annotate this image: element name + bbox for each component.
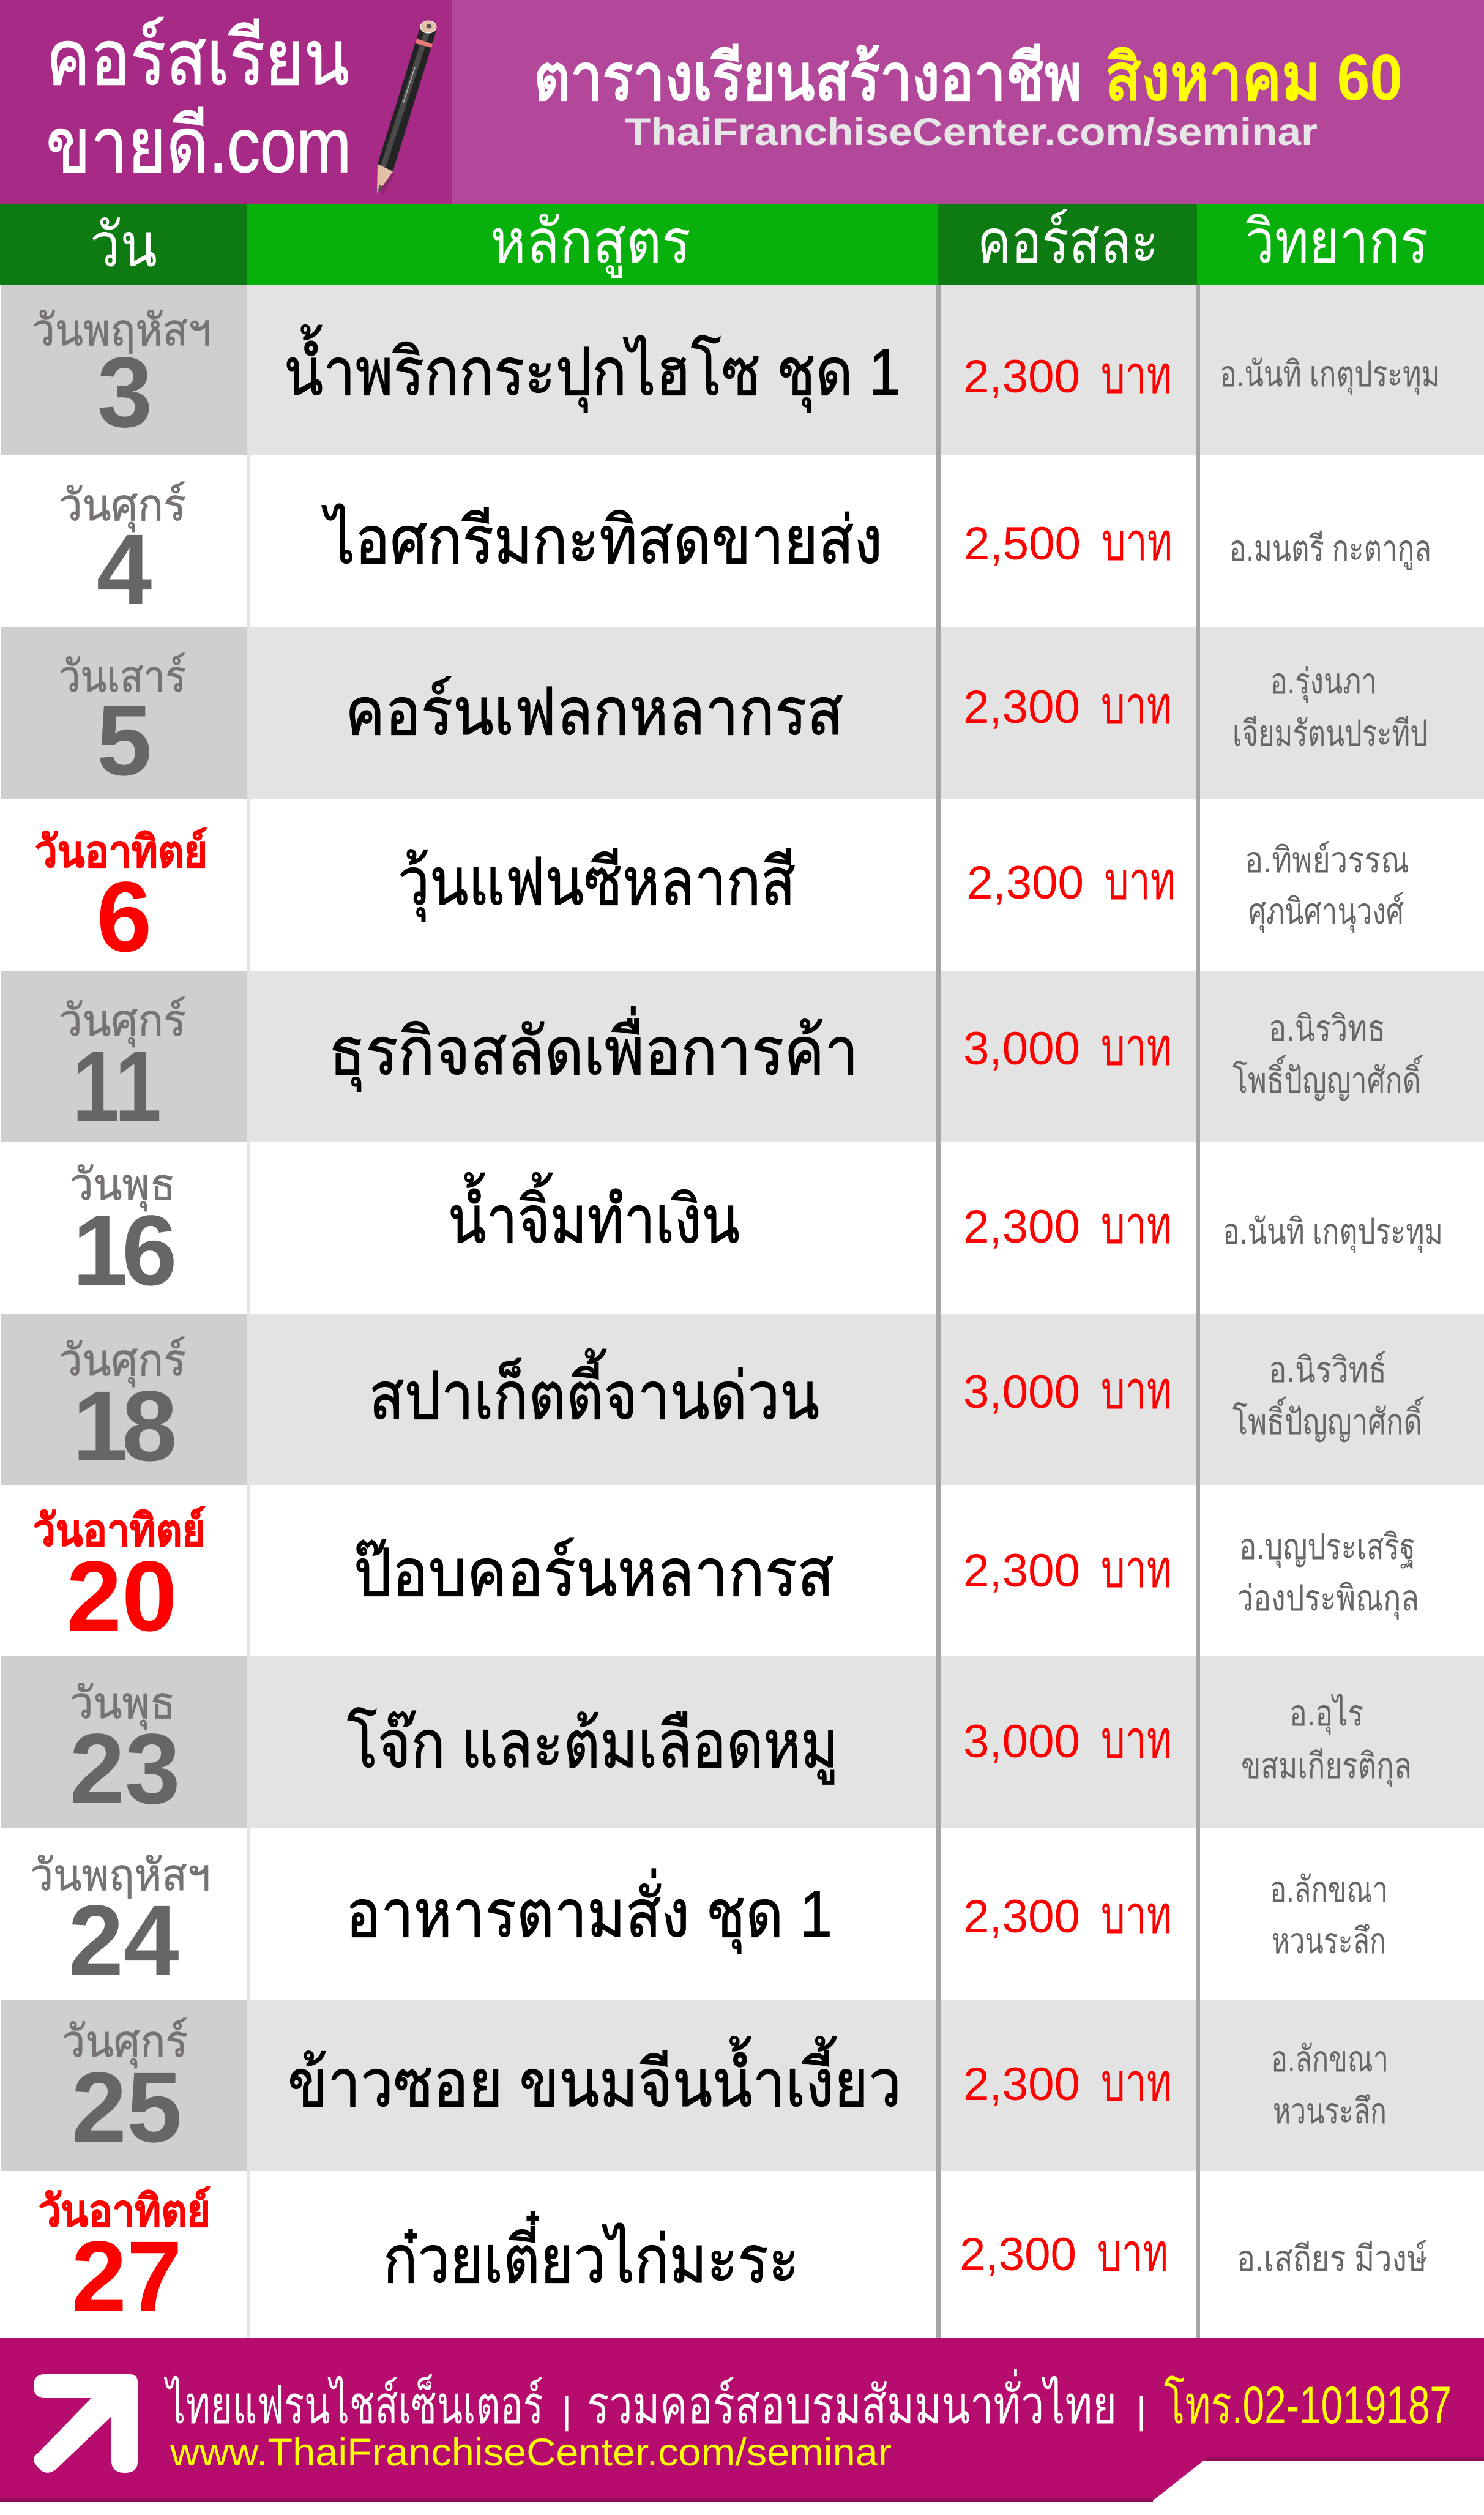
footer text: separator: | bbox=[562, 2390, 572, 2432]
date number: 27 bbox=[71, 2220, 182, 2332]
price: บาท bbox=[1101, 346, 1172, 405]
icon: arrow bbox=[34, 2374, 138, 2473]
price bbox=[963, 1711, 1172, 1769]
footer banner bbox=[0, 2338, 1484, 2502]
price: บาท bbox=[1101, 1711, 1172, 1769]
day label: วันศุกร์ bbox=[59, 1336, 186, 1387]
instructor bbox=[1270, 1870, 1388, 1961]
day label: วันอาทิตย์ bbox=[35, 827, 207, 876]
date number: 20 bbox=[66, 1540, 177, 1652]
instructor: ศุภนิศานุวงศ์ bbox=[1248, 892, 1404, 933]
price: บาท bbox=[1101, 2053, 1172, 2112]
price bbox=[963, 1361, 1172, 1420]
day label: วันอาทิตย์ bbox=[33, 1506, 206, 1555]
instructor: ขสมเกียรติกุล bbox=[1241, 1746, 1412, 1788]
instructor bbox=[1241, 1693, 1412, 1788]
row 11 bbox=[62, 2017, 1389, 2163]
price: 2,300 bbox=[960, 2229, 1076, 2281]
footer text: company: ไทยแฟรนไชส์เซ็นเตอร์ bbox=[164, 2374, 543, 2435]
instructor: เจียมรัตนประทีป bbox=[1232, 714, 1428, 753]
row 12 bbox=[39, 2186, 1427, 2332]
date number: 18 bbox=[72, 1370, 174, 1482]
day label: วันพุธ bbox=[70, 1160, 176, 1211]
icon: pencil bbox=[377, 21, 436, 197]
price: 2,300 bbox=[963, 1891, 1080, 1943]
row 9 bbox=[69, 1679, 1412, 1825]
logo text: course site name line 2: ขายดี.com bbox=[46, 102, 351, 189]
price: บาท bbox=[1101, 1361, 1172, 1420]
price bbox=[963, 2053, 1172, 2112]
course name: น้ำจิ้มทำเงิน bbox=[448, 1172, 740, 1257]
price: 3,000 bbox=[963, 1023, 1080, 1075]
price bbox=[963, 346, 1172, 405]
instructor bbox=[1237, 1527, 1419, 1620]
course name: ธุรกิจสลัดเพื่อการค้า bbox=[329, 1006, 859, 1092]
price: บาท bbox=[1102, 513, 1173, 572]
price: 3,000 bbox=[963, 1366, 1080, 1418]
footer text: tagline: รวมคอร์สอบรมสัมมนาทั่วไทย bbox=[587, 2369, 1117, 2435]
table header bbox=[0, 204, 1484, 285]
instructor: อ.ลักขณา bbox=[1271, 2039, 1389, 2079]
instructor: อ.นิรวิทธ์ bbox=[1269, 1350, 1387, 1390]
instructor: หวนระลึก bbox=[1272, 1921, 1386, 1961]
day label: วันพฤหัสฯ bbox=[32, 306, 211, 355]
panel: title banner bbox=[452, 0, 1484, 204]
row 2 bbox=[59, 481, 1431, 625]
date number: 5 bbox=[97, 684, 152, 796]
header: course: หลักสูตร bbox=[490, 207, 691, 278]
row 3 bbox=[59, 652, 1428, 796]
header: instructor: วิทยากร bbox=[1245, 207, 1428, 276]
instructor bbox=[1232, 1350, 1424, 1442]
instructor: โพธิ์ปัญญาศักดิ์ bbox=[1232, 1055, 1423, 1101]
price: บาท bbox=[1101, 1018, 1172, 1077]
course name: น้ำพริกกระปุกไฮโซ ชุด 1 bbox=[284, 324, 901, 413]
instructor: อ.รุ่งนภา bbox=[1270, 662, 1377, 703]
day label: วันพฤหัสฯ bbox=[30, 1851, 211, 1900]
price: บาท bbox=[1101, 1540, 1172, 1599]
course name: ป๊อบคอร์นหลากรส bbox=[354, 1536, 834, 1610]
date number: 24 bbox=[68, 1884, 179, 1996]
subtitle url: ThaiFranchiseCenter.com/seminar bbox=[625, 111, 1318, 154]
instructor: ว่องประพิณกุล bbox=[1237, 1579, 1419, 1620]
price: บาท bbox=[1105, 852, 1176, 911]
date number: 16 bbox=[72, 1194, 174, 1306]
price bbox=[963, 676, 1172, 735]
course name: ข้าวซอย ขนมจีนน้ำเงี้ยว bbox=[288, 2036, 901, 2120]
price bbox=[963, 1196, 1172, 1255]
row 1 bbox=[32, 306, 1440, 448]
day label: วันศุกร์ bbox=[62, 2017, 188, 2068]
instructor bbox=[1232, 1009, 1423, 1101]
instructor bbox=[1232, 662, 1428, 753]
logo text: course site name line 1: คอร์สเรียน bbox=[46, 15, 349, 101]
instructor: อ.ทิพย์วรรณ bbox=[1245, 840, 1409, 880]
row 10 bbox=[30, 1851, 1388, 1996]
price bbox=[960, 2224, 1168, 2282]
price: 3,000 bbox=[963, 1716, 1080, 1768]
course name: ไอศกรีมกะทิสดขายส่ง bbox=[321, 503, 882, 577]
price bbox=[967, 852, 1176, 911]
header: price per course: คอร์สละ bbox=[977, 207, 1158, 276]
day label: วันเสาร์ bbox=[59, 652, 186, 701]
course name: วุ้นแฟนซีหลากสี bbox=[398, 845, 796, 922]
date number: 11 bbox=[72, 1030, 162, 1142]
title month: สิงหาคม 60 bbox=[1105, 42, 1403, 114]
instructor: หวนระลึก bbox=[1273, 2091, 1387, 2131]
price: 2,300 bbox=[963, 351, 1080, 403]
footer text: separator: | bbox=[1136, 2390, 1146, 2432]
date number: 4 bbox=[97, 513, 152, 625]
price bbox=[963, 1018, 1172, 1077]
footer text: website: www.ThaiFranchiseCenter.com/seminar bbox=[170, 2431, 892, 2474]
price bbox=[963, 1540, 1172, 1599]
header: day: วัน bbox=[90, 211, 157, 280]
price: บาท bbox=[1101, 1196, 1172, 1255]
course name: โจ๊ก และต้มเลือดหมู bbox=[347, 1707, 838, 1785]
price bbox=[963, 1886, 1172, 1945]
title: ตารางเรียนสร้างอาชีพ bbox=[534, 42, 1082, 114]
price: 2,300 bbox=[963, 2058, 1080, 2110]
day label: วันศุกร์ bbox=[59, 996, 186, 1047]
instructor: อ.บุญประเสริฐ bbox=[1239, 1527, 1415, 1569]
price: 2,300 bbox=[967, 857, 1084, 909]
row 6 bbox=[70, 1160, 1443, 1306]
price bbox=[964, 513, 1173, 572]
date number: 3 bbox=[97, 336, 152, 448]
date number: 23 bbox=[69, 1713, 181, 1825]
price: บาท bbox=[1101, 676, 1172, 735]
row 4 bbox=[35, 827, 1409, 973]
day label: วันพุธ bbox=[70, 1679, 176, 1730]
course name: คอร์นเฟลกหลากรส bbox=[345, 675, 843, 749]
instructor: อ.มนตรี กะตากูล bbox=[1229, 529, 1431, 570]
instructor: อ.อุไร bbox=[1289, 1693, 1363, 1735]
row 8 bbox=[33, 1506, 1419, 1652]
panel: logo bbox=[0, 0, 452, 204]
instructor bbox=[1245, 840, 1409, 933]
course name: สปาเก็ตตี้จานด่วน bbox=[369, 1348, 819, 1433]
price: 2,300 bbox=[963, 1545, 1080, 1597]
instructor: อ.นิรวิทธ bbox=[1269, 1009, 1385, 1048]
price: 2,500 bbox=[964, 518, 1081, 570]
price: บาท bbox=[1101, 1886, 1172, 1945]
price: 2,300 bbox=[963, 681, 1080, 733]
day label: วันอาทิตย์ bbox=[39, 2186, 211, 2236]
row 5 bbox=[59, 996, 1423, 1142]
date number: 25 bbox=[71, 2051, 182, 2163]
price: 2,300 bbox=[963, 1201, 1080, 1253]
instructor: อ.เสถียร มีวงษ์ bbox=[1237, 2239, 1427, 2279]
day label: วันศุกร์ bbox=[59, 481, 186, 532]
course name: อาหารตามสั่ง ชุด 1 bbox=[346, 1869, 832, 1954]
course name: ก๋วยเตี๋ยวไก่มะระ bbox=[383, 2211, 799, 2296]
date number: 6 bbox=[97, 861, 152, 973]
instructor: โพธิ์ปัญญาศักดิ์ bbox=[1232, 1396, 1424, 1442]
instructor bbox=[1271, 2039, 1389, 2131]
instructor: อ.ลักขณา bbox=[1270, 1870, 1388, 1910]
price: บาท bbox=[1097, 2224, 1168, 2282]
row 7 bbox=[59, 1336, 1424, 1482]
